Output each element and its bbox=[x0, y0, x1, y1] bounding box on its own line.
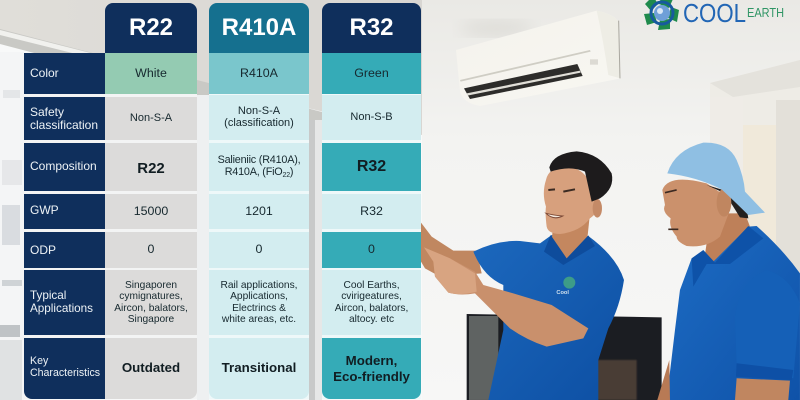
R22 applications: cymignatures, bbox=[119, 291, 183, 302]
R32 safety: Non-S-B bbox=[350, 111, 393, 123]
R22 safety: Non-S-A bbox=[130, 112, 172, 124]
R410A composition: Salieniic (R410A), bbox=[218, 154, 300, 166]
R32 GWP bbox=[322, 194, 421, 229]
R22 color bbox=[105, 53, 197, 94]
row label: ODP bbox=[24, 232, 105, 268]
R32 ODP: 0 bbox=[368, 242, 375, 256]
air conditioner bbox=[456, 11, 621, 106]
row label: Safety classification: Safety bbox=[30, 104, 64, 118]
R410A color bbox=[209, 53, 309, 94]
column header: R410A: R410A bbox=[222, 14, 296, 41]
R410A GWP bbox=[209, 194, 309, 229]
R410A applications bbox=[209, 270, 309, 335]
TV bbox=[467, 314, 662, 400]
person right: shirt bbox=[667, 226, 800, 400]
row label: ODP: ODP bbox=[30, 242, 56, 256]
row label: Key Characteristics bbox=[24, 338, 105, 399]
R22 composition: R22 bbox=[137, 160, 165, 177]
R410A applications: Rail applications, bbox=[220, 280, 298, 291]
R22 color: White bbox=[135, 66, 167, 80]
R410A color: R410A bbox=[240, 66, 278, 80]
R22 composition bbox=[105, 143, 197, 191]
person right: sleeve bbox=[735, 270, 800, 378]
person left: hair bbox=[549, 151, 612, 202]
person left: far arm bbox=[421, 223, 482, 277]
person right: neck bbox=[703, 213, 755, 265]
icon: logo swirl globe bbox=[644, 0, 679, 30]
row label: Composition bbox=[24, 143, 105, 191]
R32 applications bbox=[322, 270, 421, 335]
left room and window bbox=[0, 0, 422, 400]
R410A safety: Non-S-A bbox=[238, 105, 280, 117]
person right: face bbox=[662, 180, 730, 246]
row label: GWP bbox=[24, 194, 105, 229]
row label: Safety classification bbox=[24, 97, 105, 140]
R22 ODP bbox=[105, 232, 197, 268]
R22 applications: Singapore bbox=[128, 314, 174, 325]
column header: R32: R32 bbox=[349, 14, 394, 41]
R410A characteristics bbox=[209, 338, 309, 399]
table backing bbox=[24, 53, 197, 399]
person right: cap bbox=[667, 143, 765, 215]
person left: eyes and mouth bbox=[548, 189, 575, 192]
R410A ODP: 0 bbox=[256, 242, 262, 256]
R32 ODP bbox=[322, 232, 421, 268]
R410A safety bbox=[209, 95, 309, 140]
R410A composition: R410A, (FiO22) bbox=[225, 166, 293, 179]
R410A characteristics: Transitional bbox=[222, 360, 296, 375]
R22 characteristics: Outdated bbox=[122, 360, 180, 375]
row label: Typical Applications: Applications bbox=[30, 302, 93, 314]
row label: Safety classification: classification bbox=[30, 118, 98, 132]
R32 applications: cvirigeatures, bbox=[341, 291, 402, 302]
R22 characteristics bbox=[105, 338, 197, 399]
row label: Composition: Composition bbox=[30, 158, 97, 172]
R410A composition bbox=[209, 143, 309, 191]
column header: R32 bbox=[322, 3, 421, 53]
R32 characteristics bbox=[322, 338, 421, 399]
right wall and soffit bbox=[710, 60, 800, 400]
R32 safety bbox=[322, 95, 421, 140]
R410A GWP: 1201 bbox=[245, 204, 273, 218]
R22 applications: Aircon, balators, bbox=[114, 302, 188, 314]
person left: face bbox=[544, 167, 600, 234]
R32 characteristics: Eco-friendly bbox=[333, 368, 410, 384]
R32 color bbox=[322, 53, 421, 94]
person right: eye and mouth bbox=[665, 190, 678, 229]
R32 applications: Aircon, balators, bbox=[335, 302, 408, 314]
R410A applications: Electrincs & bbox=[232, 302, 286, 314]
row label: GWP: GWP bbox=[30, 203, 59, 217]
R32 composition bbox=[322, 143, 421, 191]
R22 safety bbox=[105, 97, 197, 140]
person left: neck and collar bbox=[551, 213, 590, 263]
R32 characteristics: Modern, bbox=[346, 352, 397, 368]
row label: Key Characteristics: Characteristics bbox=[30, 366, 100, 378]
column header: R22: R22 bbox=[129, 14, 173, 41]
column header: R410A bbox=[209, 3, 309, 53]
R32 GWP: R32 bbox=[360, 204, 383, 218]
logo wordmark: EARTH bbox=[747, 5, 784, 20]
R410A applications: white areas, etc. bbox=[222, 314, 296, 325]
R32 applications: Cool Earths, bbox=[343, 280, 400, 291]
row label: Key Characteristics: Key bbox=[30, 354, 48, 366]
R32 composition: R32 bbox=[357, 158, 386, 175]
R22 ODP: 0 bbox=[148, 242, 154, 256]
person right: forearm bbox=[735, 378, 790, 400]
row label: Typical Applications: Typical bbox=[30, 288, 66, 302]
R22 applications: Singaporen bbox=[125, 280, 177, 291]
background photo: room, air conditioner, technicians: Cool bbox=[556, 290, 569, 296]
R22 GWP: 15000 bbox=[134, 204, 168, 218]
row label: Color bbox=[24, 53, 105, 94]
R22 applications bbox=[105, 270, 197, 335]
person left: shirt bbox=[473, 235, 624, 400]
column header: R22 bbox=[105, 3, 197, 53]
R410A ODP bbox=[209, 232, 309, 268]
R32 color: Green bbox=[354, 66, 389, 80]
shirt logo bbox=[563, 277, 575, 289]
R22 GWP bbox=[105, 194, 197, 229]
R410A safety: (classification) bbox=[224, 116, 294, 128]
R410A applications: Applications, bbox=[230, 291, 288, 302]
row label: Typical Applications bbox=[24, 270, 105, 335]
logo: Cool Earth bbox=[644, 0, 784, 30]
person left: raised forearm and hand bbox=[424, 247, 588, 347]
row label: Color: Color bbox=[30, 66, 59, 80]
R32 applications: altocy. etc bbox=[349, 314, 394, 325]
